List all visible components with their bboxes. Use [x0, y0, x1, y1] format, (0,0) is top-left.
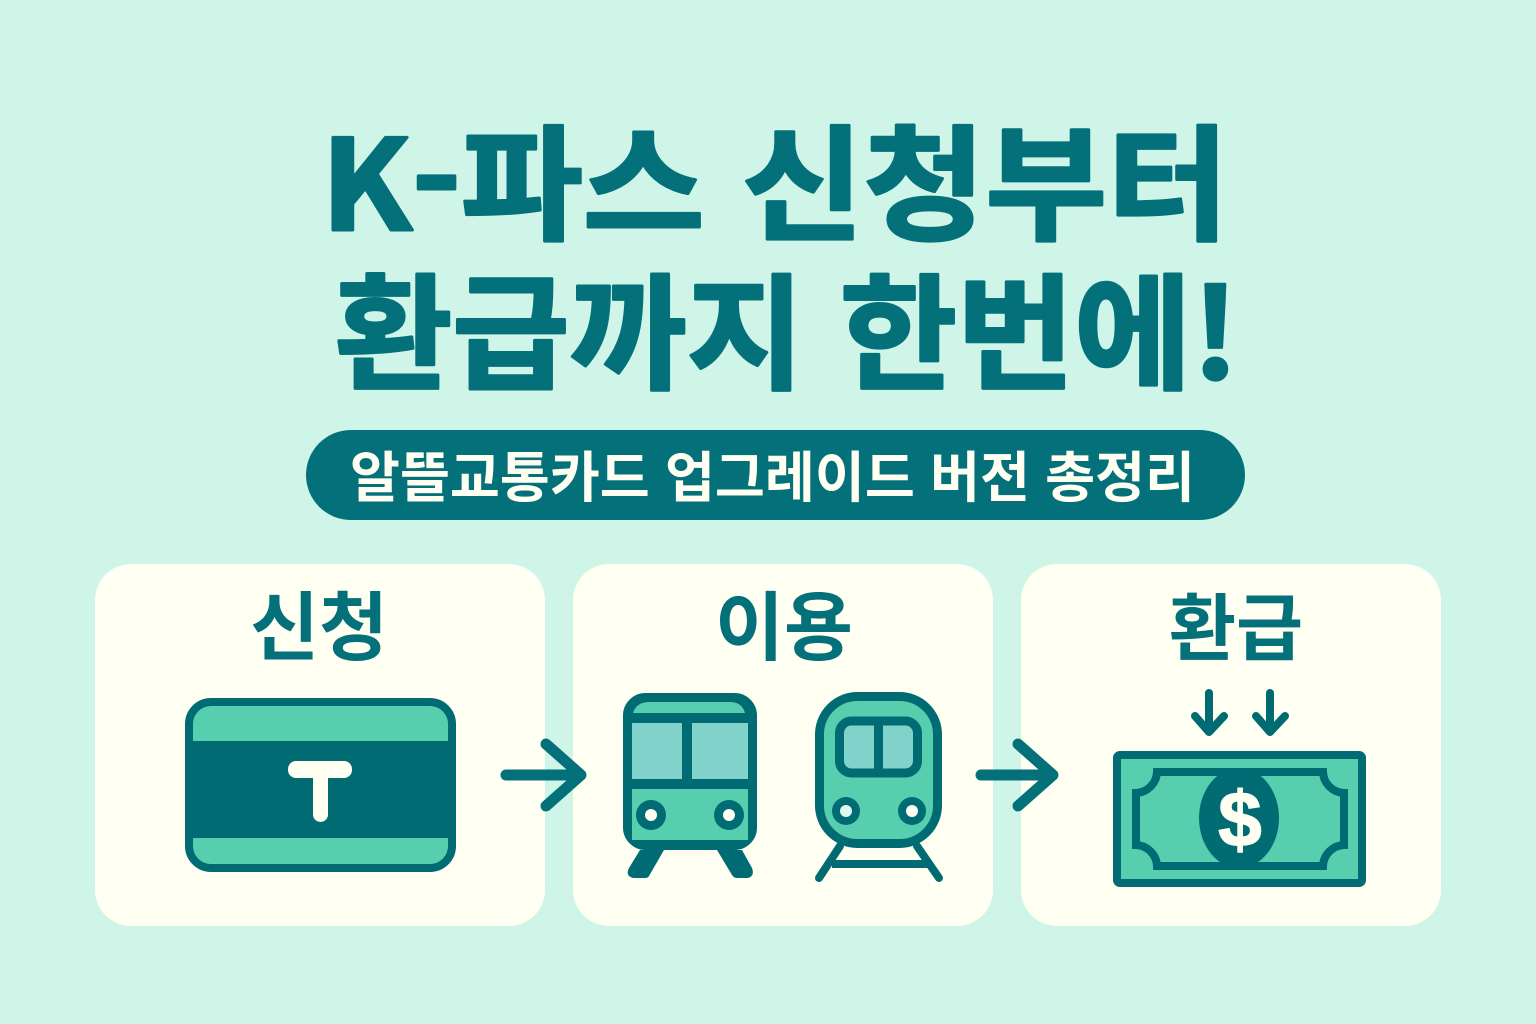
panel: 환급	[1021, 564, 1441, 926]
icon: banknote	[1117, 755, 1362, 883]
icon: transit card	[185, 702, 456, 868]
icon: banknote: $	[1218, 775, 1262, 863]
panel: 신청	[95, 564, 545, 926]
heading: 환급: 환급	[1169, 570, 1303, 676]
heading: 신청: 신청	[250, 567, 388, 676]
icon: subway train	[819, 696, 939, 878]
icon: bus-style train	[628, 698, 753, 878]
subtitle pill: 알뜰교통카드 업그레이드 버전 총정리	[350, 433, 1195, 513]
heading: 이용: 이용	[715, 567, 853, 676]
panel: 이용	[573, 564, 993, 926]
icon: down arrows	[1195, 693, 1285, 732]
arrow: 신청 to 이용	[506, 744, 581, 806]
title: K-파스 신청부터	[321, 85, 1229, 266]
title: 환급까지 한번에!	[335, 234, 1239, 415]
arrow: 이용 to 환급	[981, 744, 1053, 806]
title	[321, 85, 1239, 415]
